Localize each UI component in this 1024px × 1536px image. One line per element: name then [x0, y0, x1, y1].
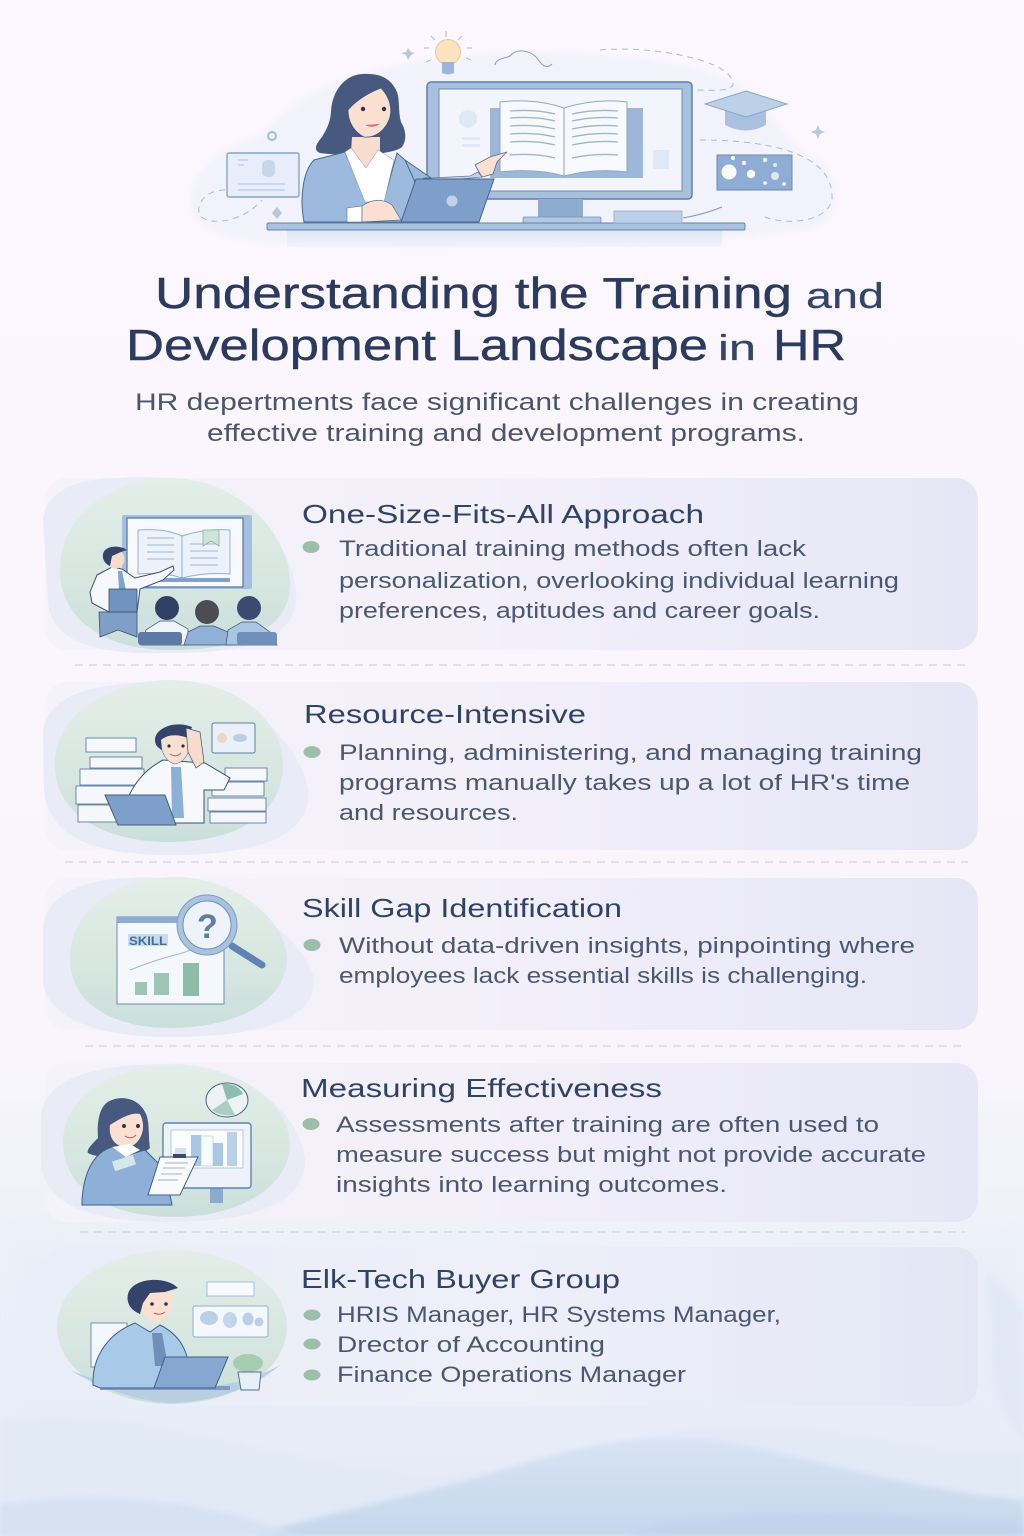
note card	[207, 1282, 254, 1296]
hero background blob	[192, 53, 835, 245]
sparkles	[268, 48, 825, 219]
panel: resource-intensive	[43, 680, 978, 855]
subtitle: HR depertments face significant challenges in creating	[135, 389, 859, 416]
presenter	[90, 547, 174, 637]
body text: programs manually takes up a lot of HR's time	[339, 770, 910, 795]
subtitle: effective training and development programs.	[207, 420, 805, 447]
icon: light bulb	[424, 31, 472, 74]
panel: measuring effectiveness	[41, 1063, 978, 1222]
panel: elk-tech buyer group	[45, 1247, 978, 1406]
worried man	[122, 724, 230, 823]
laptop	[105, 795, 176, 825]
monitor	[427, 82, 692, 223]
training board	[122, 515, 252, 589]
graduation cap	[705, 91, 787, 130]
body text: Traditional training methods often lack	[339, 536, 807, 561]
laptop logo	[446, 196, 458, 206]
title: and	[806, 275, 884, 316]
body text: insights into learning outcomes.	[336, 1172, 727, 1197]
heading: Skill Gap Identification	[302, 893, 622, 923]
bullets	[304, 1310, 320, 1380]
title: HR	[773, 321, 846, 370]
left info panel	[227, 153, 299, 197]
illustration: skill chart and magnifying glass	[43, 877, 314, 1037]
title: Understanding the Training	[155, 269, 792, 318]
paper stacks	[76, 738, 267, 823]
heading: Measuring Effectiveness	[301, 1073, 662, 1103]
body text: preferences, aptitudes and career goals.	[339, 598, 820, 623]
laptop	[401, 179, 494, 222]
shapes panel	[193, 1306, 268, 1337]
monitor with bars	[163, 1123, 251, 1203]
bullet	[304, 746, 320, 758]
icon: cloud doodle	[495, 51, 552, 66]
body text: Finance Operations Manager	[337, 1362, 687, 1387]
seated audience	[138, 596, 277, 645]
panel: one-size-fits-all approach	[43, 477, 978, 653]
illustration: overwhelmed man with stacks of paper	[43, 680, 308, 855]
heading: One-Size-Fits-All Approach	[302, 499, 704, 529]
clipboard	[148, 1154, 198, 1195]
body text	[339, 740, 922, 825]
body text: measure success but might not provide accurate	[336, 1142, 926, 1167]
body text: personalization, overlooking individual learning	[339, 568, 899, 593]
body text: HRIS Manager, HR Systems Manager,	[337, 1302, 781, 1327]
potted plant	[233, 1354, 263, 1390]
illustration: woman with clipboard and monitor	[41, 1064, 305, 1222]
small monitor	[212, 723, 255, 753]
magnifying glass: ?	[197, 908, 218, 946]
body text: Drector of Accounting	[337, 1332, 605, 1357]
bullet	[302, 541, 320, 553]
subtitle	[135, 389, 859, 447]
panel: skill gap identification	[43, 877, 978, 1037]
body text	[336, 1112, 926, 1197]
body text	[339, 933, 915, 988]
man	[93, 1280, 190, 1388]
dashed swirls	[199, 49, 832, 221]
bullet	[302, 1118, 320, 1130]
illustration: trainer with audience	[43, 477, 296, 653]
hero illustration: presenter at desk with monitor	[192, 31, 835, 247]
body text: Assessments after training are often used to	[336, 1112, 879, 1137]
woman	[82, 1098, 172, 1205]
body text: Planning, administering, and managing training	[339, 740, 922, 765]
desk	[267, 207, 745, 247]
chart card: SKILL	[129, 934, 167, 948]
chart card	[117, 917, 224, 1004]
paper	[91, 1323, 127, 1367]
bullet	[304, 939, 320, 951]
body text: employees lack essential skills is challenging.	[339, 963, 867, 988]
title: in	[718, 327, 756, 368]
right dotted panel	[717, 155, 792, 190]
body text: Without data-driven insights, pinpointing where	[339, 933, 915, 958]
title	[126, 269, 884, 370]
pie chart	[206, 1083, 248, 1117]
body text: and resources.	[339, 800, 518, 825]
illustration: man at laptop with plant	[57, 1250, 287, 1404]
woman presenter	[302, 74, 507, 222]
body text	[337, 1302, 781, 1387]
title: Development Landscape	[126, 321, 708, 370]
body text	[339, 536, 899, 623]
heading: Elk-Tech Buyer Group	[301, 1264, 620, 1294]
faint screen icons	[459, 110, 669, 169]
laptop	[154, 1357, 228, 1388]
heading: Resource-Intensive	[304, 699, 586, 729]
open book	[490, 101, 643, 178]
magnifying glass	[177, 895, 262, 965]
